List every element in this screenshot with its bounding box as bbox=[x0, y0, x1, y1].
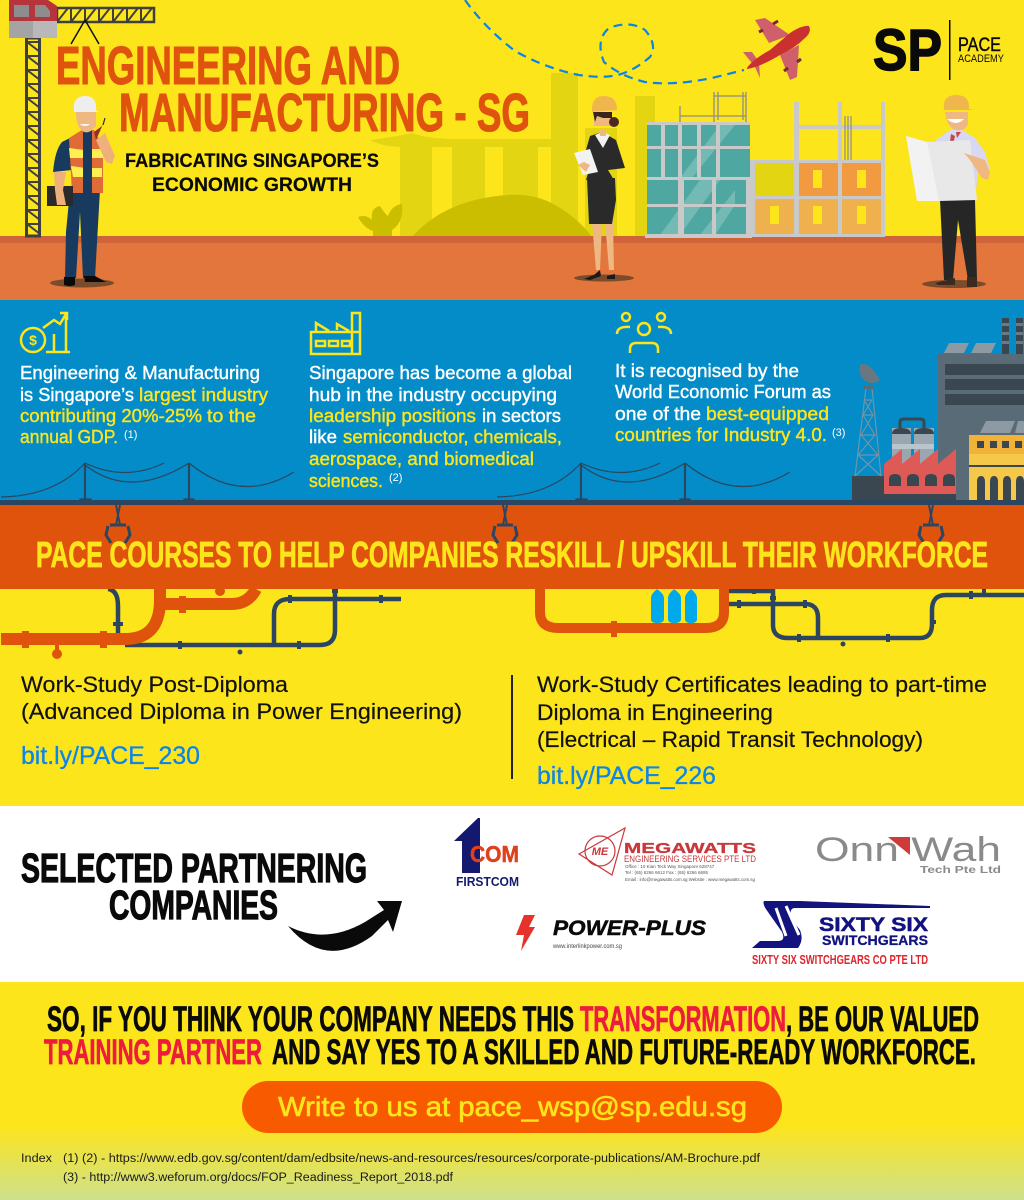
text: fact 2: like bbox=[309, 426, 337, 447]
text: fact 1 bbox=[20, 362, 269, 447]
text: fact 3: (3) bbox=[832, 427, 845, 439]
subtitle: FABRICATING SINGAPORE’S bbox=[125, 150, 379, 172]
building under construction bbox=[750, 102, 885, 237]
icon: claws bbox=[106, 505, 943, 543]
illustration: factory complex bbox=[852, 318, 1024, 500]
text: course left bbox=[21, 672, 462, 770]
text: fact 2: (2) bbox=[389, 472, 402, 484]
text: fact 1: is Singapore’s bbox=[20, 384, 134, 405]
logo: Megawatts: Email : info@megawatts.com.sg Website : www.megawatts.com.sg bbox=[625, 877, 755, 882]
title bbox=[56, 36, 530, 143]
text: index: (3) - http://www3.weforum.org/docs/FOP_Readiness_Report_2018.pdf bbox=[63, 1172, 454, 1184]
figure: engineer with radio bbox=[47, 96, 115, 288]
text: fact 2: semiconductor, chemicals, bbox=[343, 426, 562, 447]
logo: Megawatts: MEGAWATTS bbox=[624, 840, 756, 857]
heading: COMPANIES bbox=[109, 882, 278, 928]
text: fact 3: World Economic Forum as bbox=[615, 381, 831, 402]
logo: Megawatts: ME bbox=[592, 846, 609, 858]
button: email: Write to us at pace_wsp@sp.edu.sg bbox=[278, 1091, 747, 1122]
heading: SELECTED PARTNERING bbox=[21, 845, 367, 891]
logo: Power-Plus bbox=[516, 915, 706, 951]
logo: Megawatts: Tel : (65) 6266 6612 Fax : (65) 6266 6695 bbox=[625, 870, 709, 875]
text: call to action bbox=[44, 1000, 979, 1072]
logo: Megawatts: Office : 10 Kian Teck Way Singapore 628747 bbox=[625, 864, 715, 869]
figure: engineer with plan bbox=[906, 95, 990, 288]
logo: SP PACE Academy: ACADEMY bbox=[958, 53, 1005, 65]
icon: people bbox=[617, 313, 671, 353]
text: fact 1: annual GDP. bbox=[20, 426, 118, 447]
ground bbox=[0, 236, 1024, 300]
text: fact 3: countries for Industry 4.0. bbox=[615, 424, 827, 445]
text: course left: bit.ly/PACE_230 bbox=[21, 742, 200, 770]
text: course right: bit.ly/PACE_226 bbox=[537, 762, 716, 790]
text: course left: (Advanced Diploma in Power Engineering) bbox=[21, 699, 462, 724]
logo: SP PACE Academy bbox=[873, 18, 1005, 83]
logo: Sixty Six: SIXTY SIX bbox=[819, 915, 928, 936]
text: fact 3 bbox=[615, 360, 845, 445]
logo: Power-Plus: POWER-PLUS bbox=[553, 917, 706, 940]
logo: Megawatts: ENGINEERING SERVICES PTE LTD bbox=[624, 854, 756, 865]
text: fact 1: largest industry bbox=[139, 384, 269, 405]
text: course right: Work-Study Certificates leading to part-time bbox=[537, 672, 987, 697]
heading bbox=[21, 845, 367, 928]
text: fact 2: in sectors bbox=[482, 405, 561, 426]
button: email bbox=[242, 1081, 782, 1133]
text: call to action: TRANSFORMATION bbox=[580, 1000, 786, 1039]
text: fact 1: contributing 20%-25% bbox=[20, 405, 202, 426]
text: course right: Diploma in Engineering bbox=[537, 700, 773, 725]
icon: coin and growth chart: $ bbox=[29, 332, 37, 348]
logo: Power-Plus: www.interlinkpower.com.sg bbox=[552, 944, 622, 950]
text: fact 3: best-equipped bbox=[706, 403, 829, 424]
logo: Firstcom: COM bbox=[470, 841, 519, 867]
skyline silhouette bbox=[358, 73, 655, 237]
text: course right bbox=[537, 672, 987, 790]
text: fact 3: one of the bbox=[615, 403, 701, 424]
logo: Firstcom bbox=[454, 818, 519, 889]
icon: coin and growth chart bbox=[21, 313, 70, 352]
crane bbox=[9, 0, 154, 236]
text: call to action: SO, IF YOU THINK YOUR COMPANY NEEDS THIS bbox=[47, 1000, 574, 1039]
title: ENGINEERING AND bbox=[56, 36, 400, 96]
logo: Sixty Six: SIXTY SIX SWITCHGEARS CO PTE LTD bbox=[752, 952, 928, 967]
text: fact 1: to the bbox=[207, 405, 256, 426]
text: fact 2: sciences. bbox=[309, 470, 383, 491]
logo: Firstcom: FIRSTCOM bbox=[456, 874, 519, 889]
panel: hero bbox=[0, 0, 1024, 300]
logo: SP PACE Academy: PACE bbox=[958, 35, 1001, 56]
flight path bbox=[465, 0, 744, 83]
text: fact 3: It is recognised by the bbox=[615, 360, 799, 381]
panel: facts bbox=[0, 300, 1024, 505]
section: pipes and courses background bbox=[0, 589, 1024, 806]
illustration: pipes bbox=[1, 586, 1024, 659]
panel: call to action bbox=[0, 982, 1024, 1200]
logo: Onn Wah: Onn Wah bbox=[815, 831, 1001, 869]
text: index: Index bbox=[21, 1153, 52, 1165]
text: fact 1: Engineering & Manufacturing bbox=[20, 362, 260, 383]
subtitle bbox=[125, 150, 379, 196]
text: course right: (Electrical – Rapid Transit Technology) bbox=[537, 727, 923, 752]
title: MANUFACTURING - SG bbox=[119, 83, 530, 143]
text: call to action: TRAINING PARTNER bbox=[44, 1033, 262, 1072]
glass building bbox=[645, 92, 752, 238]
text: fact 2: hub in the industry occupying bbox=[309, 384, 557, 405]
text: fact 2 bbox=[309, 362, 572, 491]
text: fact 2: aerospace, and biomedical bbox=[309, 448, 534, 469]
text: fact 2: leadership positions bbox=[309, 405, 476, 426]
banner bbox=[0, 500, 1024, 589]
power lines bbox=[1, 463, 790, 505]
figure: businesswoman bbox=[574, 96, 634, 282]
icon: airplane bbox=[743, 18, 810, 80]
arrow bbox=[288, 901, 402, 951]
logo: Megawatts bbox=[579, 828, 756, 882]
panel: partners bbox=[0, 806, 1024, 982]
logo: SP PACE Academy: SP bbox=[873, 18, 942, 83]
icon: factory bbox=[311, 313, 360, 354]
text: index: (1) (2) - https://www.edb.gov.sg/content/dam/edbsite/news-and-resources/resources/corporate-publications/AM-Brochure.pdf bbox=[63, 1153, 761, 1165]
logo: Onn Wah bbox=[815, 831, 1001, 876]
logo: Sixty Six: SWITCHGEARS bbox=[822, 932, 928, 948]
subtitle: ECONOMIC GROWTH bbox=[152, 174, 352, 196]
logo: Onn Wah: Tech Pte Ltd bbox=[920, 865, 1001, 876]
text: fact 1: (1) bbox=[124, 429, 137, 441]
text: index bbox=[21, 1153, 761, 1184]
logo: Sixty Six bbox=[752, 901, 930, 967]
text: fact 2: Singapore has become a global bbox=[309, 362, 572, 383]
text: course left: Work-Study Post-Diploma bbox=[21, 672, 288, 697]
